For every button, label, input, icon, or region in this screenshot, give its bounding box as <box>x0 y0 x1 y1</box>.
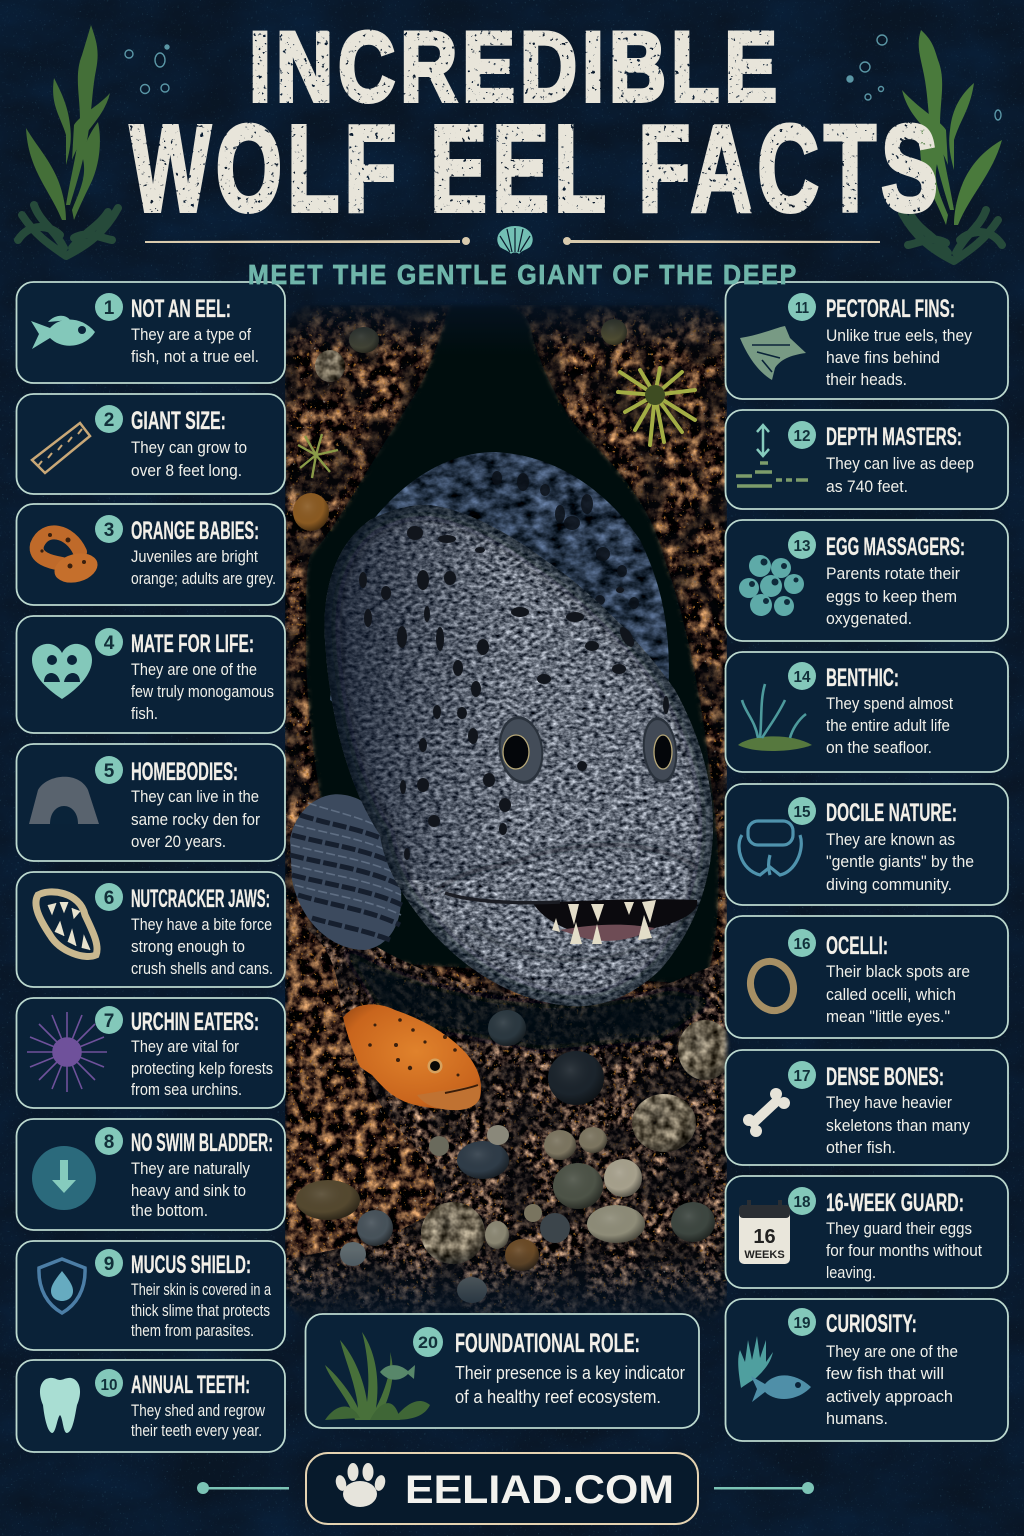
badge 9 <box>95 1249 123 1277</box>
text 8 <box>131 1160 251 1220</box>
central photo: wolf eel in rocky den <box>285 299 732 1322</box>
text 1: They are a type of <box>131 326 251 344</box>
text 7: They are vital for <box>131 1038 239 1056</box>
website name: EELIAD.COM <box>405 1468 674 1512</box>
badge 15: 15 <box>794 804 811 821</box>
badge 4: 4 <box>104 633 115 654</box>
badge 15 <box>788 797 816 825</box>
seaweed top right <box>902 30 1002 261</box>
badge 14: 14 <box>794 669 811 686</box>
anemone top right <box>618 368 695 445</box>
text 6: They have a bite force <box>131 916 272 934</box>
title: INCREDIBLE WOLF EEL FACTS: INCREDIBLE <box>249 11 782 122</box>
text 15 <box>826 831 974 894</box>
badge 8: 8 <box>104 1132 114 1153</box>
text 13: eggs to keep them <box>826 588 957 606</box>
den shadow <box>306 299 719 985</box>
icon: fin <box>740 326 806 380</box>
badge 2 <box>95 405 123 433</box>
text 10: They shed and regrow <box>131 1402 265 1420</box>
text 8: the bottom. <box>131 1202 208 1220</box>
panel 8: no swim bladder <box>16 1119 285 1230</box>
heading 5: HOMEBODIES: <box>131 758 238 786</box>
badge 13 <box>788 531 816 559</box>
text 17: skeletons than many <box>826 1117 971 1135</box>
text 14: They spend almost <box>826 695 953 713</box>
panel 4: mate for life <box>16 616 285 733</box>
text 13 <box>826 565 960 628</box>
panel 5: homebodies <box>16 744 285 861</box>
text 5: They can live in the <box>131 788 259 806</box>
eel pectoral fin <box>290 794 402 950</box>
text 18: leaving. <box>826 1264 876 1282</box>
badge 6: 6 <box>104 888 114 909</box>
text 4 <box>131 661 274 723</box>
text 13: Parents rotate their <box>826 565 960 583</box>
text 19 <box>826 1343 958 1428</box>
photo top fade <box>286 304 725 352</box>
text 5: over 20 years. <box>131 833 226 851</box>
badge 20 <box>413 1327 443 1357</box>
panel 12: depth masters <box>726 410 1008 509</box>
badge 11 <box>788 293 816 321</box>
footer website badge <box>306 1453 698 1524</box>
text 18 <box>826 1220 982 1282</box>
text 19: They are one of the <box>826 1343 958 1361</box>
text 7: from sea urchins. <box>131 1081 242 1099</box>
heading 9: MUCUS SHIELD: <box>131 1251 251 1279</box>
text 12: They can live as deep <box>826 455 974 473</box>
mouth and teeth <box>445 893 697 944</box>
badge 19: 19 <box>794 1315 811 1332</box>
text 6 <box>131 916 273 978</box>
heading 16: OCELLI: <box>826 932 888 960</box>
text 19: humans. <box>826 1410 888 1428</box>
text 19: few fish that will <box>826 1365 944 1383</box>
heading 17: DENSE BONES: <box>826 1063 944 1091</box>
text 3: orange; adults are grey. <box>131 570 276 588</box>
seaweed top left <box>18 25 118 256</box>
badge 12: 12 <box>794 428 811 445</box>
badge 20: 20 <box>418 1333 438 1352</box>
text 11: Unlike true eels, they <box>826 327 973 345</box>
text 6: strong enough to <box>131 938 245 956</box>
text 3 <box>131 548 276 588</box>
icon: heart with figures <box>32 644 92 699</box>
text 2: They can grow to <box>131 439 247 457</box>
badge 7 <box>95 1006 123 1034</box>
rock mass lower left <box>285 925 436 1260</box>
icon: eggs <box>739 555 804 616</box>
text 16: called ocelli, which <box>826 986 956 1004</box>
badge 17: 17 <box>794 1068 811 1085</box>
text 1: fish, not a true eel. <box>131 348 259 366</box>
text 12: as 740 feet. <box>826 478 908 496</box>
badge 17 <box>788 1061 816 1089</box>
text 16: Their black spots are <box>826 963 970 981</box>
badge 3 <box>95 515 123 543</box>
text 6: crush shells and cans. <box>131 960 273 978</box>
text 9 <box>131 1281 272 1340</box>
text 14: the entire adult life <box>826 717 950 735</box>
text 16: mean "little eyes." <box>826 1008 950 1026</box>
rock walls <box>285 305 727 1005</box>
badge 11: 11 <box>795 300 809 317</box>
icon: hand and fish <box>738 1336 811 1402</box>
icon: ocellus ring <box>744 955 800 1017</box>
icon: paw <box>334 1463 387 1507</box>
heading 7: URCHIN EATERS: <box>131 1008 259 1036</box>
panel 10: annual teeth <box>16 1360 285 1452</box>
badge 3: 3 <box>104 520 114 541</box>
heading 14: BENTHIC: <box>826 664 899 692</box>
footer connector left <box>197 1482 289 1494</box>
text 2: over 8 feet long. <box>131 462 242 480</box>
text 15: diving community. <box>826 876 952 894</box>
icon: bone <box>743 1088 790 1137</box>
text 11: their heads. <box>826 371 907 389</box>
panel 9: mucus shield <box>16 1241 285 1350</box>
icon: ruler <box>32 423 90 473</box>
panel 19: curiosity <box>726 1299 1008 1441</box>
text 12 <box>826 455 974 496</box>
heading 2: GIANT SIZE: <box>131 407 226 435</box>
icon: shield drop <box>39 1259 85 1313</box>
heading 20: FOUNDATIONAL ROLE: <box>455 1328 640 1358</box>
heading 4: MATE FOR LIFE: <box>131 630 254 658</box>
text 2 <box>131 439 247 480</box>
text 14 <box>826 695 953 757</box>
icon: fish <box>31 316 95 349</box>
text 8: heavy and sink to <box>131 1182 246 1200</box>
subtitle: MEET THE GENTLE GIANT OF THE DEEP <box>248 259 798 290</box>
heading 3: ORANGE BABIES: <box>131 517 259 545</box>
text 5: same rocky den for <box>131 811 260 829</box>
heading 6: NUTCRACKER JAWS: <box>131 885 270 913</box>
icon: rocky den <box>29 777 99 824</box>
badge 13: 13 <box>794 538 811 555</box>
icon: sink arrow <box>32 1146 96 1210</box>
badge 16: 16 <box>794 936 811 953</box>
text 15: "gentle giants" by the <box>826 853 974 871</box>
text 17 <box>826 1094 971 1157</box>
panel 6: nutcracker jaws <box>16 872 285 987</box>
icon: shell <box>497 226 533 254</box>
panel 1: not an eel <box>16 282 285 383</box>
text 15: They are known as <box>826 831 955 849</box>
text 7 <box>131 1038 273 1099</box>
badge 1: 1 <box>104 298 115 319</box>
heading 19: CURIOSITY: <box>826 1310 917 1338</box>
text 5 <box>131 788 260 851</box>
eel spots <box>359 526 669 860</box>
icon: orange eels <box>37 532 101 587</box>
text 17: other fish. <box>826 1139 896 1157</box>
badge 19 <box>788 1308 816 1336</box>
heading 8: NO SWIM BLADDER: <box>131 1129 273 1157</box>
badge 5: 5 <box>104 761 115 782</box>
text 4: few truly monogamous <box>131 683 274 701</box>
text 19: actively approach <box>826 1388 953 1406</box>
badge 7: 7 <box>104 1011 114 1032</box>
badge 18: 18 <box>794 1194 811 1211</box>
text 20: Their presence is a key indicator <box>455 1363 685 1383</box>
icon: calendar: 16 <box>753 1226 776 1248</box>
panel 14: benthic <box>726 652 1008 772</box>
icon: tooth <box>40 1378 80 1433</box>
heading 10: ANNUAL TEETH: <box>131 1371 250 1399</box>
text 10: their teeth every year. <box>131 1422 262 1440</box>
text 1 <box>131 326 259 366</box>
text 3: Juveniles are bright <box>131 548 258 566</box>
eel body and head <box>320 500 713 1006</box>
badge 14 <box>788 662 816 690</box>
icon: calendar <box>739 1200 790 1264</box>
icon: depth arrow <box>736 425 808 486</box>
heading 1: NOT AN EEL: <box>131 295 231 323</box>
panel 11: pectoral fins <box>726 282 1008 399</box>
text 4: fish. <box>131 705 158 723</box>
pebbles <box>296 1010 732 1303</box>
text 9: thick slime that protects <box>131 1302 270 1320</box>
photo bottom fade <box>285 1250 727 1322</box>
badge 1 <box>95 293 123 321</box>
badge 12 <box>788 421 816 449</box>
text 18: for four months without <box>826 1242 982 1260</box>
badge 6 <box>95 883 123 911</box>
text 13: oxygenated. <box>826 610 912 628</box>
gravel seabed <box>285 925 727 1320</box>
panel 13: egg massagers <box>726 520 1008 641</box>
badge 16 <box>788 929 816 957</box>
badge 4 <box>95 628 123 656</box>
text 20 <box>455 1363 685 1407</box>
icon: jaws <box>36 892 97 956</box>
badge 5 <box>95 756 123 784</box>
title: INCREDIBLE WOLF EEL FACTS <box>130 11 943 238</box>
juvenile orange wolf eel <box>337 1004 481 1110</box>
text 4: They are one of the <box>131 661 257 679</box>
text 8: They are naturally <box>131 1160 251 1178</box>
rock top stones <box>293 319 627 531</box>
icon: calendar: WEEKS <box>744 1249 785 1261</box>
text 17: They have heavier <box>826 1094 952 1112</box>
text 11: have fins behind <box>826 349 940 367</box>
footer connector right <box>714 1482 814 1494</box>
panel 20: foundational role <box>306 1314 699 1428</box>
text 7: protecting kelp forests <box>131 1060 273 1078</box>
badge 8 <box>95 1127 123 1155</box>
eyes <box>498 716 678 784</box>
text 11 <box>826 327 973 389</box>
bubbles <box>125 35 1001 120</box>
text 20: of a healthy reef ecosystem. <box>455 1387 661 1407</box>
text 18: They guard their eggs <box>826 1220 972 1238</box>
badge 2: 2 <box>104 410 114 431</box>
icon: seaweed and fish <box>325 1332 430 1420</box>
badge 9: 9 <box>104 1254 114 1275</box>
icon: seafloor plants <box>738 684 812 751</box>
panel 18: 16-week guard <box>726 1176 1008 1288</box>
text 9: Their skin is covered in a <box>131 1281 272 1299</box>
small anemone left <box>298 434 338 478</box>
badge 10: 10 <box>100 1377 118 1394</box>
divider with shell <box>145 226 880 254</box>
text 14: on the seafloor. <box>826 739 932 757</box>
panel 7: urchin eaters <box>16 998 285 1108</box>
panel 2: giant size <box>16 394 285 494</box>
text 9: them from parasites. <box>131 1322 254 1340</box>
panel 15: docile nature <box>726 784 1008 905</box>
panel 16: ocelli <box>726 916 1008 1038</box>
text 10 <box>131 1402 265 1440</box>
icon: sea urchin <box>27 1012 107 1092</box>
eel back coil <box>330 452 669 702</box>
panel 3: orange babies <box>16 504 285 605</box>
panel 17: dense bones <box>726 1050 1008 1165</box>
badge 18 <box>788 1187 816 1215</box>
icon: diving mask <box>739 821 801 875</box>
badge 10 <box>95 1369 123 1397</box>
text 16 <box>826 963 970 1026</box>
